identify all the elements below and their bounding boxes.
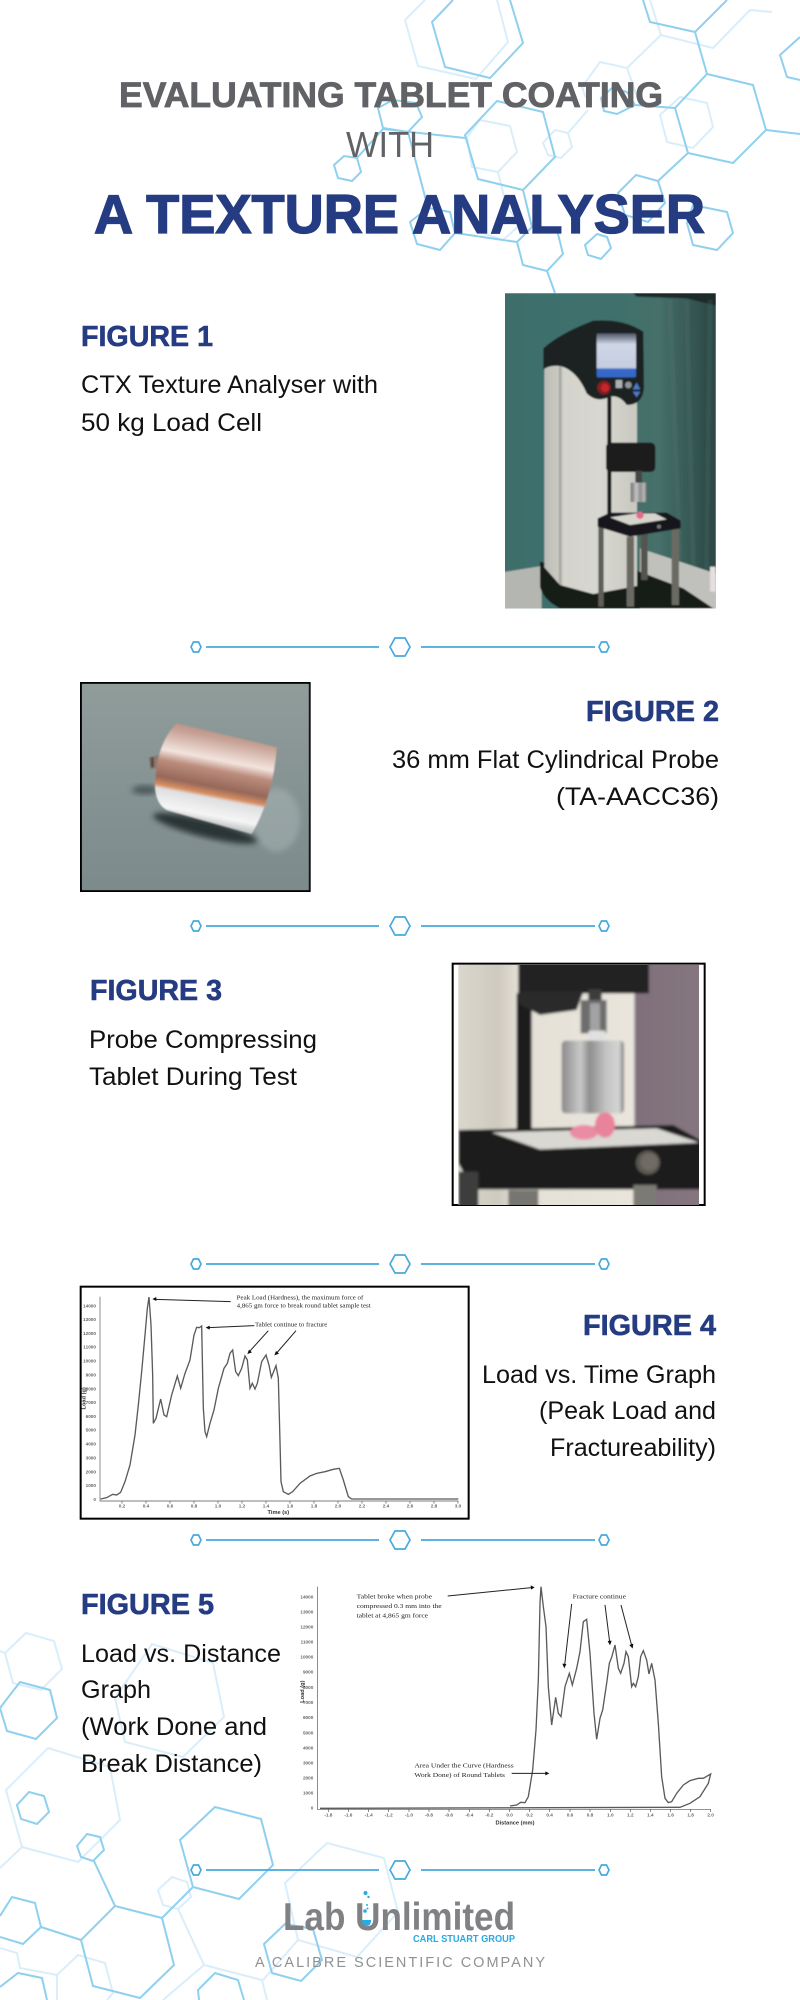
annotation: fracture continue: Fracture continue bbox=[573, 1594, 626, 1601]
y axis labels: 8000 bbox=[86, 1386, 96, 1391]
load-distance curve bbox=[320, 1587, 711, 1808]
x axis labels: 1.0 bbox=[215, 1504, 222, 1509]
annotation: fracture: Tablet continue to fracture bbox=[255, 1322, 328, 1329]
x axis labels: 0.4 bbox=[143, 1504, 150, 1509]
icon: flask in U bbox=[362, 1891, 371, 1926]
photo: flat cylindrical probe bbox=[80, 682, 311, 892]
y axis labels: 2000 bbox=[86, 1469, 96, 1474]
figure 3 caption: Tablet During Test bbox=[89, 1063, 297, 1091]
arrows bbox=[448, 1588, 632, 1773]
logo: Lab Unlimited bbox=[255, 1891, 545, 1971]
y axis labels: 2000 bbox=[303, 1776, 314, 1781]
figure 1 caption: 50 kg Load Cell bbox=[81, 409, 262, 437]
title line 2: WITH bbox=[346, 124, 434, 165]
divider 1 bbox=[191, 638, 609, 656]
title line 1: EVALUATING TABLET COATING bbox=[119, 76, 663, 115]
annotation: area under the curve: Work Done) of Round Tablets bbox=[414, 1772, 506, 1779]
y axis title: Load (g) bbox=[300, 1680, 306, 1703]
x axis labels: 1.4 bbox=[647, 1812, 654, 1817]
x axis labels: 2.2 bbox=[359, 1504, 366, 1509]
y axis labels: 13000 bbox=[83, 1317, 96, 1322]
x axis labels: 1.8 bbox=[687, 1812, 694, 1817]
y axis labels: 1000 bbox=[303, 1791, 314, 1796]
x axis labels: 2.0 bbox=[335, 1504, 342, 1509]
figure 2 caption: 36 mm Flat Cylindrical Probe bbox=[392, 746, 719, 774]
y axis labels: 6000 bbox=[303, 1715, 314, 1720]
panel: figure 3 text bbox=[89, 975, 317, 1091]
y axis labels: 9000 bbox=[303, 1670, 314, 1675]
y axis labels: 11000 bbox=[301, 1640, 314, 1645]
figure 3 heading: FIGURE 3 bbox=[90, 975, 222, 1007]
background hexagons: top right bbox=[334, 0, 800, 293]
x axis labels: 1.6 bbox=[667, 1812, 674, 1817]
y axis labels: 12000 bbox=[83, 1331, 96, 1336]
y axis labels: 4000 bbox=[303, 1745, 314, 1750]
x axis labels: -1.6 bbox=[344, 1812, 353, 1817]
y axis labels: 7000 bbox=[303, 1700, 314, 1705]
panel: figure 1 text bbox=[81, 321, 378, 437]
chart: load vs time graph bbox=[81, 1287, 469, 1519]
x axis labels: 0.2 bbox=[526, 1812, 533, 1817]
annotation: tablet broke: Tablet broke when probe bbox=[357, 1594, 432, 1601]
y axis labels: 14000 bbox=[300, 1594, 314, 1599]
figure 5 caption: (Work Done and bbox=[81, 1713, 267, 1741]
y axis labels: 4000 bbox=[86, 1442, 96, 1447]
x axis labels: 0.4 bbox=[546, 1812, 553, 1817]
y axis labels: 7000 bbox=[86, 1400, 96, 1405]
x axis labels: 2.0 bbox=[707, 1812, 714, 1817]
x axis labels: 0.6 bbox=[167, 1504, 174, 1509]
panel: figure 2 text bbox=[392, 696, 719, 811]
x axis labels: 1.2 bbox=[627, 1812, 634, 1817]
x axis labels: -1.2 bbox=[385, 1812, 393, 1817]
y axis labels: 6000 bbox=[86, 1414, 96, 1419]
x axis labels: 0.0 bbox=[506, 1812, 513, 1817]
y axis labels: 10000 bbox=[83, 1359, 96, 1364]
logo subline: CARL STUART GROUP bbox=[413, 1933, 515, 1945]
x axis labels: 1.4 bbox=[263, 1504, 270, 1509]
photo: CTX texture analyser bbox=[500, 290, 720, 613]
figure 1 caption: CTX Texture Analyser with bbox=[81, 371, 378, 399]
x axis title: Time (s) bbox=[268, 1510, 289, 1516]
y axis labels: 10000 bbox=[300, 1655, 314, 1660]
y axis labels: 13000 bbox=[300, 1609, 314, 1614]
photo: probe compressing tablet bbox=[452, 960, 706, 1210]
x axis labels: -1.0 bbox=[405, 1812, 413, 1817]
load curve bbox=[101, 1297, 458, 1499]
x axis labels: -1.8 bbox=[324, 1812, 333, 1817]
annotation: area under the curve: Area Under the Curve (Hardness bbox=[414, 1763, 514, 1770]
divider 4 bbox=[191, 1531, 609, 1549]
arrows bbox=[155, 1299, 296, 1353]
figure 2 heading: FIGURE 2 bbox=[586, 696, 719, 728]
divider 2 bbox=[191, 917, 609, 935]
figure 5 caption: Load vs. Distance bbox=[81, 1640, 281, 1668]
x axis labels: -1.4 bbox=[365, 1812, 373, 1817]
x axis labels: 3.0 bbox=[455, 1504, 462, 1509]
y axis labels: 8000 bbox=[303, 1685, 314, 1690]
figure 5 heading: FIGURE 5 bbox=[81, 1589, 214, 1621]
title bbox=[94, 76, 705, 245]
annotation: tablet broke: tablet at 4,865 gm force bbox=[357, 1612, 428, 1619]
panel: figure 5 text bbox=[81, 1589, 281, 1778]
tagline: A CALIBRE SCIENTIFIC COMPANY bbox=[255, 1955, 545, 1971]
divider 5 bbox=[191, 1861, 609, 1879]
x axis labels: -0.6 bbox=[445, 1812, 453, 1817]
chart: load vs distance graph bbox=[287, 1578, 720, 1832]
arrowheads bbox=[531, 1585, 633, 1775]
x axis labels: -0.2 bbox=[485, 1812, 494, 1817]
x axis labels: 0.2 bbox=[119, 1504, 126, 1509]
figure 5 caption: Graph bbox=[81, 1676, 151, 1704]
x axis labels: 1.8 bbox=[311, 1504, 318, 1509]
y axis title: Load (g) bbox=[81, 1387, 87, 1409]
figure 3 caption: Probe Compressing bbox=[89, 1026, 317, 1054]
y axis labels: 0 bbox=[93, 1497, 96, 1502]
x axis labels: 2.6 bbox=[407, 1504, 414, 1509]
x axis labels: -0.8 bbox=[425, 1812, 433, 1817]
divider 3 bbox=[191, 1255, 609, 1273]
figure 4 caption: (Peak Load and bbox=[539, 1397, 716, 1425]
arrowheads bbox=[152, 1297, 279, 1355]
background hexagons: bottom left bbox=[0, 1633, 398, 2000]
annotation: tablet broke: compressed 0.3 mm into the bbox=[357, 1603, 442, 1610]
title line 3: A TEXTURE ANALYSER bbox=[94, 183, 705, 245]
x axis title: Distance (mm) bbox=[496, 1821, 535, 1827]
y axis labels: 12000 bbox=[300, 1624, 314, 1629]
logo wordmark: Lab Unlimited bbox=[283, 1896, 515, 1939]
x axis labels: 1.2 bbox=[239, 1504, 246, 1509]
x axis labels: 0.8 bbox=[587, 1812, 594, 1817]
y axis labels: 11000 bbox=[83, 1345, 96, 1350]
y axis labels: 1000 bbox=[86, 1483, 96, 1488]
y axis labels: 14000 bbox=[83, 1303, 96, 1308]
panel: figure 4 text bbox=[482, 1310, 716, 1462]
y axis labels: 0 bbox=[311, 1806, 314, 1811]
x axis labels: 0.8 bbox=[191, 1504, 198, 1509]
x axis labels: -0.4 bbox=[465, 1812, 474, 1817]
y axis labels: 3000 bbox=[303, 1760, 314, 1765]
figure 4 caption: Fractureability) bbox=[550, 1434, 716, 1462]
figure 4 heading: FIGURE 4 bbox=[583, 1310, 716, 1342]
annotation: peak load: 4,865 gm force to break round tablet sample test bbox=[237, 1302, 371, 1309]
figure 5 caption: Break Distance) bbox=[81, 1750, 262, 1778]
y axis labels: 3000 bbox=[86, 1455, 96, 1460]
x axis labels: 2.4 bbox=[383, 1504, 390, 1509]
annotation: peak load: Peak Load (Hardness), the maximum force of bbox=[237, 1294, 364, 1301]
x axis labels: 1.0 bbox=[607, 1812, 614, 1817]
y axis labels: 5000 bbox=[303, 1730, 314, 1735]
x axis labels: 2.8 bbox=[431, 1504, 438, 1509]
x axis labels: 0.6 bbox=[567, 1812, 574, 1817]
y axis labels: 5000 bbox=[86, 1428, 96, 1433]
x axis labels: 1.6 bbox=[287, 1504, 294, 1509]
y axis labels: 9000 bbox=[86, 1372, 96, 1377]
figure 1 heading: FIGURE 1 bbox=[81, 321, 213, 353]
figure 2 caption: (TA-AACC36) bbox=[556, 783, 719, 811]
figure 4 caption: Load vs. Time Graph bbox=[482, 1361, 716, 1389]
